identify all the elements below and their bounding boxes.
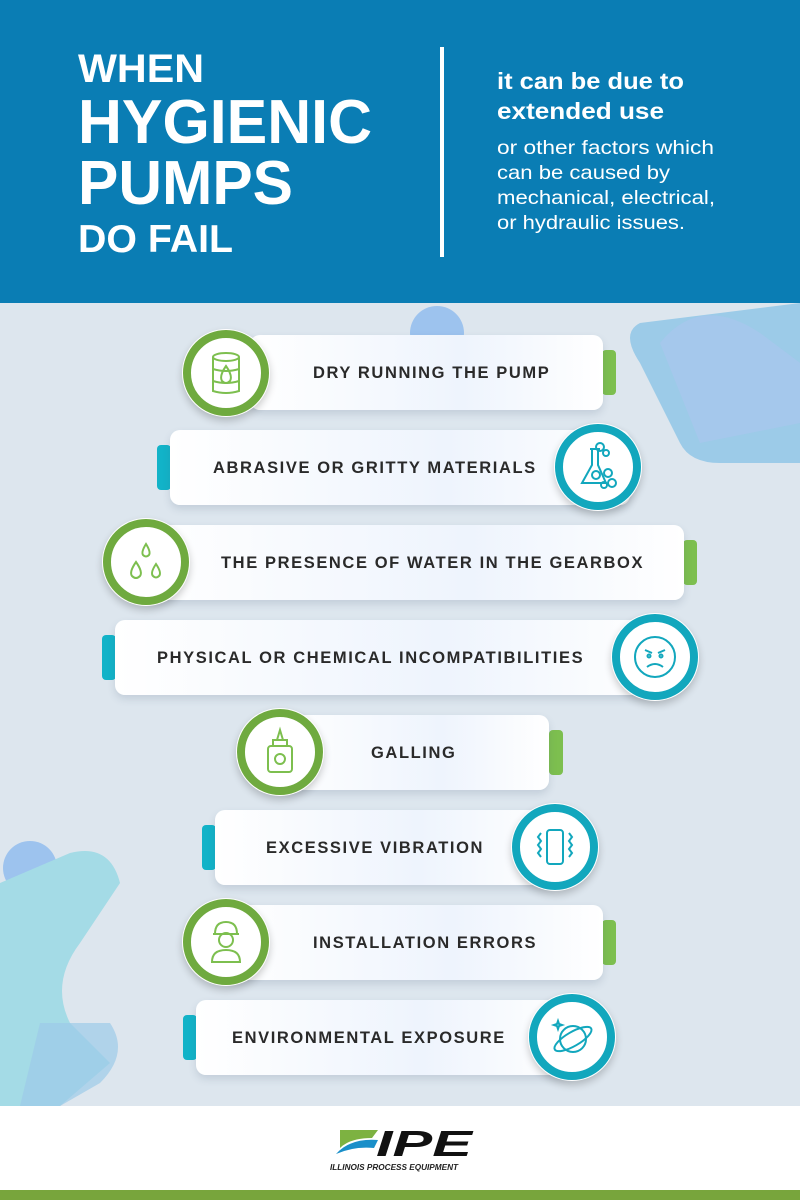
decorative background blobs	[0, 303, 800, 1106]
title: HYGIENIC	[78, 88, 372, 157]
item 4: incompatibilities	[102, 613, 702, 708]
item 5: galling: GALLING	[371, 744, 456, 762]
item 6: vibration	[202, 803, 602, 898]
icon: oil barrel	[182, 329, 270, 417]
item 3: water in gearbox	[98, 518, 697, 614]
item 7: installation errors	[178, 898, 616, 994]
item 1: dry running	[178, 329, 616, 424]
subtitle text: or other factors which	[497, 137, 714, 159]
title: PUMPS	[78, 149, 293, 218]
icon: vibrating phone	[511, 803, 599, 891]
logo	[330, 1124, 474, 1172]
title: DO FAIL	[78, 218, 233, 261]
icon: water drops	[102, 518, 190, 606]
item 6: vibration: EXCESSIVE VIBRATION	[266, 839, 484, 857]
header panel	[0, 0, 800, 303]
icon: angry face	[611, 613, 699, 701]
subtitle text: or hydraulic issues.	[497, 212, 685, 234]
icon: flask with bubbles	[554, 423, 642, 511]
subtitle text: mechanical, electrical,	[497, 187, 715, 209]
item 1: dry running: DRY RUNNING THE PUMP	[313, 364, 550, 382]
icon: lubricant bottle	[236, 708, 324, 796]
item 5: galling	[232, 708, 563, 804]
footer green bar	[0, 1190, 800, 1200]
title	[78, 47, 372, 261]
footer	[0, 1106, 800, 1190]
item 7: installation errors: INSTALLATION ERRORS	[313, 934, 537, 952]
subtitle text: it can be due to	[497, 68, 684, 94]
item 2: abrasive: ABRASIVE OR GRITTY MATERIALS	[213, 459, 537, 477]
logo: ILLINOIS PROCESS EQUIPMENT	[330, 1163, 459, 1172]
icon: planet	[528, 993, 616, 1081]
item 8: environmental exposure	[183, 993, 620, 1088]
subtitle text: extended use	[497, 98, 664, 124]
icon: worker	[182, 898, 270, 986]
item 3: water in gearbox: THE PRESENCE OF WATER IN THE GEARBOX	[221, 554, 644, 572]
item 2: abrasive	[157, 423, 646, 518]
subtitle text	[497, 68, 715, 234]
logo: IPE	[376, 1124, 474, 1164]
item 4: incompatibilities: PHYSICAL OR CHEMICAL INCOMPATIBILITIES	[157, 649, 584, 667]
item 8: environmental exposure: ENVIRONMENTAL EXPOSURE	[232, 1029, 506, 1047]
title: WHEN	[78, 47, 204, 91]
subtitle text: can be caused by	[497, 162, 670, 184]
